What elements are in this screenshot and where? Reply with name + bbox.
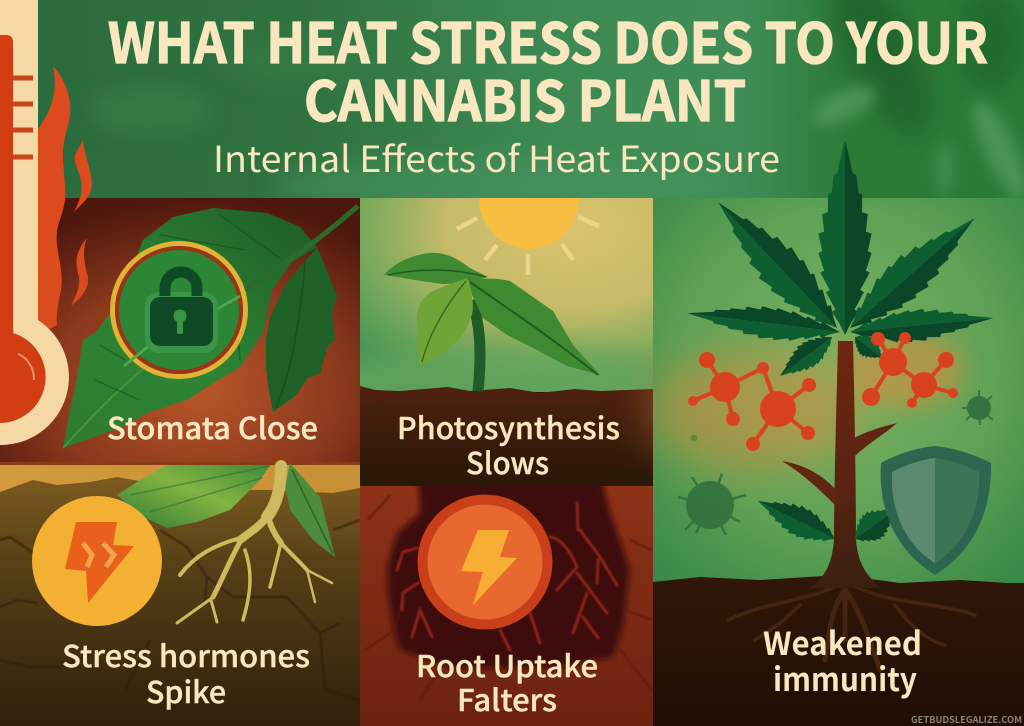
icon: virus small <box>962 390 993 425</box>
icon: roots <box>728 580 975 670</box>
caption: photosynthesis slows: Slows <box>466 439 549 483</box>
caption: weakened immunity: Weakened <box>763 619 922 665</box>
icon: virus large <box>678 474 746 535</box>
icon: sun <box>457 198 599 275</box>
soil ground <box>653 575 1024 726</box>
icon: leaf with stem <box>63 206 358 448</box>
icon: left molecule <box>688 352 816 451</box>
icon: pale roots <box>177 466 332 623</box>
caption: photosynthesis slows: Photosynthesis <box>397 404 620 448</box>
caption: weakened immunity: immunity <box>773 655 917 701</box>
panel: stomata close <box>0 198 360 462</box>
soil strip <box>360 386 653 486</box>
panel: stress hormones spike <box>0 462 360 726</box>
icon: sprouting leaves <box>117 463 335 557</box>
panel: root uptake falters <box>360 480 653 726</box>
caption: root uptake falters: Root Uptake <box>416 642 598 686</box>
icon: hormone bolt circle <box>32 496 162 626</box>
panel: weakened immunity <box>650 140 1024 726</box>
icon: red roots <box>397 503 617 650</box>
subtitle: Internal Effects of Heat Exposure <box>213 131 780 183</box>
caption: root uptake falters: Falters <box>457 676 557 720</box>
icon: seedling <box>384 253 600 391</box>
icon: plant stem <box>782 341 897 588</box>
icon: thermometer and flames <box>0 0 92 445</box>
icon: shield <box>881 446 991 575</box>
watermark: GETBUDSLEGALIZE.COM <box>911 713 1022 726</box>
icon: lightning circle <box>418 494 552 630</box>
icon: right molecule <box>862 332 958 408</box>
caption: stomata close: Stomata Close <box>107 404 318 448</box>
header background <box>94 0 1024 584</box>
panel: photosynthesis slows <box>360 198 653 475</box>
icon: cannabis fan leaves <box>685 140 995 553</box>
caption: stress hormones spike: Stress hormones <box>62 632 310 676</box>
caption: stress hormones spike: Spike <box>146 668 226 712</box>
icon: padlock in circle <box>112 244 246 376</box>
title: CANNABIS PLANT <box>304 57 746 137</box>
